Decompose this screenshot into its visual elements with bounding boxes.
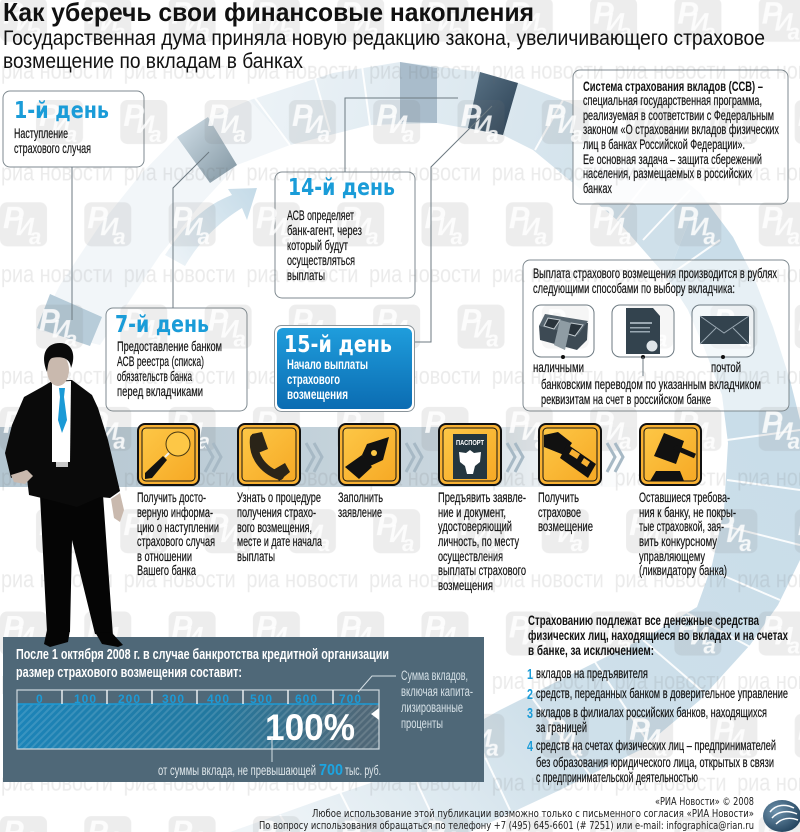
icon: banknotes <box>539 314 588 350</box>
day 14 text: осуществляться <box>287 252 355 268</box>
step 1 text: Вашего банка <box>137 562 196 578</box>
exclusions list: 1 <box>527 666 533 683</box>
day 14 text: выплаты <box>287 267 325 283</box>
icon: gavel <box>639 423 702 486</box>
step 2 text: Узнать о процедуре <box>237 489 321 505</box>
exclusions list: 2 <box>527 686 533 703</box>
person figure <box>5 343 124 647</box>
limit caption: от суммы вклада, не превышающей <box>158 763 316 778</box>
limit caption: тыс. руб. <box>345 763 381 778</box>
day 7 text <box>115 312 222 399</box>
scale bar chart: 0 <box>36 692 43 706</box>
step 2 text: выплаты <box>237 548 275 564</box>
hands <box>11 470 33 484</box>
step 5 text: Получить <box>538 489 579 505</box>
icon: pen nib <box>338 423 401 486</box>
panel: day 15 <box>274 326 414 412</box>
side note: Сумма вкладов, <box>401 668 468 683</box>
step 5 text: страховое <box>538 504 581 520</box>
step 6 text <box>639 489 736 578</box>
dark panel background <box>3 637 484 782</box>
step 6 text: Оставшиеся требова- <box>639 489 730 505</box>
panel: day 15: Начало выплаты <box>287 357 368 372</box>
icon: globe logo <box>763 800 800 832</box>
payment methods text and icons <box>533 265 777 407</box>
step 1 text: в отношении <box>137 548 192 564</box>
footer credits: «РИА Новости» © 2008 <box>655 796 754 808</box>
scale bar chart: 500 <box>250 692 272 706</box>
deposit insurance text <box>583 79 779 196</box>
day 1 text <box>14 98 109 156</box>
payment methods text and icons: почтой <box>711 359 741 375</box>
day 7 text: 7-й день <box>115 312 209 338</box>
step 6 text: (ликвидатору банка) <box>639 562 727 578</box>
footer credits <box>259 796 754 832</box>
exclusions list: 3 <box>527 705 533 722</box>
exclusions list: за границей <box>536 719 587 735</box>
step 1 text: верную информа- <box>137 504 213 520</box>
step 1 text: страхового случая <box>137 533 215 549</box>
step chevrons <box>205 443 623 472</box>
step 6 text: управляющему <box>639 548 705 564</box>
subtitle: возмещение по вкладам в банках <box>3 50 303 73</box>
scale bar chart: 100 <box>74 692 96 706</box>
icon: magnifier <box>137 423 200 486</box>
step 4 text: ние и документ, <box>438 504 506 520</box>
trousers <box>40 495 113 636</box>
step 5 text: возмещение <box>538 518 593 534</box>
panel: day 15: страхового <box>287 372 340 387</box>
day 7 text: перед вкладчиками <box>117 383 203 399</box>
day 14 text: 14-й день <box>288 175 395 201</box>
leader lines <box>272 676 396 762</box>
exclusions heading: в банке, за исключением: <box>528 642 654 658</box>
day 7 text: обязательств банка <box>117 368 192 384</box>
step 3 text <box>338 489 383 520</box>
step 1 text: Получить досто- <box>137 489 206 505</box>
scale bar chart: 300 <box>162 692 184 706</box>
subtitle <box>3 27 765 73</box>
deposit insurance text: банках <box>583 180 612 196</box>
panel: compensation amount <box>16 646 473 779</box>
day 1 text: страхового случая <box>14 140 91 156</box>
day 14 text: АСВ определяет <box>287 207 354 223</box>
step 6 text: ния к банку, не покры- <box>639 504 736 520</box>
limit caption: 700 <box>319 762 343 779</box>
day 7 text: АСВ реестра (списка) <box>117 353 204 369</box>
side note: проценты <box>401 716 443 731</box>
day 14 text: банк-агент, через <box>287 222 362 238</box>
icon: document <box>626 308 660 354</box>
connector lines <box>72 98 492 342</box>
grey process strip <box>0 427 640 487</box>
shirt <box>52 381 71 462</box>
payment methods text and icons: наличными <box>533 359 584 375</box>
scale bar chart: 200 <box>118 692 140 706</box>
shoes <box>44 630 70 647</box>
head <box>47 354 69 386</box>
payment methods text and icons: реквизитам на счет в российском банке <box>541 391 711 407</box>
day 14 text <box>287 175 395 283</box>
side note: лизированные <box>401 700 463 715</box>
day 7 text: Предоставление банком <box>117 338 222 354</box>
exclusions list: вкладов на предъявителя <box>536 665 648 681</box>
panel: deposit insurance system <box>573 70 788 204</box>
icon: envelope <box>700 316 749 344</box>
exclusions list: 4 <box>527 738 533 755</box>
step 4 text <box>438 489 526 593</box>
inner curved arrow <box>165 188 257 266</box>
panel: payment methods <box>523 260 789 411</box>
step 4 text: выплаты страхового <box>438 562 526 578</box>
exclusions heading <box>528 612 788 658</box>
jacket <box>5 380 120 507</box>
necktie <box>58 388 67 433</box>
step 2 text: вого возмещения, <box>237 519 312 535</box>
step 2 text <box>237 489 322 564</box>
scale bar chart <box>17 690 379 749</box>
side note <box>401 668 473 731</box>
icon: passport: ПАСПОРТ <box>456 440 485 447</box>
step 4 text: удостоверяющий <box>438 518 512 534</box>
step 2 text: получения страхо- <box>237 504 316 520</box>
icon: telephone <box>237 423 301 486</box>
step 5 text <box>538 489 593 534</box>
scale bar chart: 400 <box>207 692 229 706</box>
panel: day 15: 15-й день <box>284 332 392 358</box>
scale bar chart: 100% <box>265 707 355 748</box>
exclusions list: с предпринимательской деятельностью <box>536 769 698 785</box>
step 4 text: осуществления <box>438 548 503 564</box>
scale bar chart: 700 <box>339 692 361 706</box>
step 3 text: заявление <box>338 504 382 520</box>
panel heading: После 1 октября 2008 г. в случае банкротства кредитной организации <box>16 646 389 663</box>
panel: day 14 <box>275 172 415 298</box>
step 6 text: тые страховкой, зая- <box>639 518 724 534</box>
step 4 text: Предъявить заявле- <box>438 489 526 505</box>
icon: receiving compensation <box>538 423 602 486</box>
day 14 text: который будут <box>287 237 348 253</box>
panel: day 1 <box>3 91 144 167</box>
step 3 text: Заполнить <box>338 489 383 505</box>
panel: day 7 <box>106 308 247 411</box>
step 6 text: вить конкурсному <box>639 533 717 549</box>
panel: day 15: возмещения <box>287 387 348 402</box>
step 4 text: возмещения <box>438 577 493 593</box>
panel heading <box>16 646 389 681</box>
side note: включая капита- <box>401 684 473 699</box>
step 1 text <box>137 489 219 578</box>
icon: passport <box>438 423 502 486</box>
scale bar chart: 600 <box>295 692 317 706</box>
exclusions list <box>527 665 788 785</box>
step 4 text: личность, по месту <box>438 533 519 549</box>
panel heading: размер страхового возмещения составит: <box>16 664 242 681</box>
step 1 text: цию о наступлении <box>137 519 219 535</box>
step 2 text: месте и дате начала <box>237 533 322 549</box>
day 1 text: 1-й день <box>14 98 109 124</box>
day 1 text: Наступление <box>14 125 68 141</box>
